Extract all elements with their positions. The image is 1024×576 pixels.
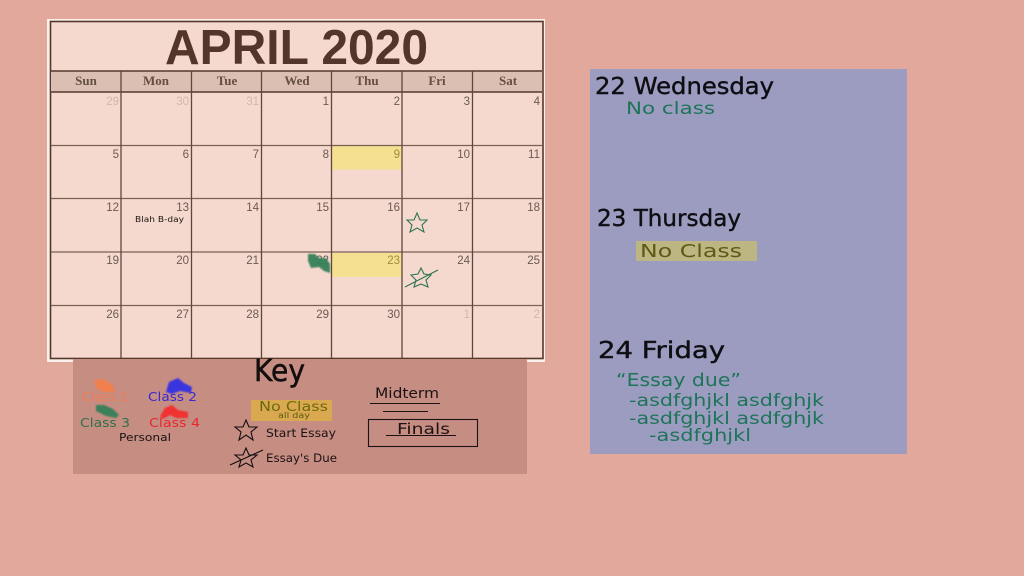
date numbers: 27 — [176, 309, 189, 321]
marker: class 3 on April 22 — [308, 254, 330, 273]
date numbers: 29 — [316, 309, 329, 321]
date numbers: 10 — [457, 149, 470, 161]
legend: midterm — [370, 386, 440, 412]
legend: essay's due: Essay's Due — [266, 451, 337, 465]
note: essay due: “Essay due” — [616, 370, 741, 391]
date numbers: 22 — [316, 255, 329, 267]
date numbers: 14 — [246, 202, 260, 214]
date numbers: 30 — [176, 96, 189, 108]
legend: class 2 — [148, 378, 197, 404]
legend: finals: Finals — [397, 420, 450, 438]
weekday header row: Mon — [143, 73, 170, 88]
date numbers: 1 — [323, 96, 329, 108]
day heading: 22 Wednesday: 22 Wednesday — [595, 74, 774, 100]
date numbers: 21 — [246, 255, 259, 267]
date numbers: 12 — [106, 202, 119, 214]
date numbers: 2 — [534, 309, 540, 321]
date numbers: 18 — [527, 202, 540, 214]
date numbers: 5 — [113, 149, 119, 161]
legend: start essay: Start Essay — [266, 426, 336, 440]
legend: personal: Personal — [119, 431, 171, 444]
legend: no class swatch: all day — [278, 411, 310, 420]
day heading: 23 Thursday: 23 Thursday — [597, 206, 741, 232]
legend: class 3: Class 3 — [80, 416, 130, 430]
note: essay due: -asdfghjkl — [649, 426, 751, 446]
panel: daily notes — [590, 69, 907, 454]
calendar title: APRIL 2020 — [165, 21, 428, 75]
date numbers: 20 — [176, 255, 189, 267]
day heading: 24 Friday: 24 Friday — [598, 338, 725, 364]
legend: class 1 — [82, 379, 128, 404]
date numbers: 1 — [464, 309, 470, 321]
date numbers: 15 — [316, 202, 329, 214]
date numbers: 19 — [106, 255, 119, 267]
panel: key — [73, 354, 527, 474]
weekday header row: Fri — [428, 73, 446, 88]
note: no class highlight — [636, 241, 757, 262]
legend: no class swatch: No Class — [259, 400, 328, 415]
date numbers — [106, 96, 541, 321]
note: essay due: -asdfghjkl asdfghjk — [629, 391, 824, 411]
key heading: Key — [254, 354, 305, 389]
date numbers: 24 — [457, 255, 471, 267]
note: no class: No class — [626, 99, 715, 119]
legend: midterm: Midterm — [375, 386, 439, 402]
date numbers: 11 — [528, 149, 540, 161]
date numbers: 7 — [253, 149, 259, 161]
panel: calendar — [47, 19, 545, 362]
date numbers: 30 — [387, 309, 400, 321]
note: essay due: -asdfghjkl asdfghjk — [629, 409, 824, 429]
weekday header row: Tue — [217, 73, 237, 88]
legend: essay's due — [230, 448, 337, 467]
legend: class 4 — [149, 405, 200, 430]
no class highlight: April 9 — [332, 146, 402, 170]
date numbers: 26 — [106, 309, 119, 321]
date numbers: 4 — [534, 96, 541, 108]
date numbers: 31 — [246, 96, 259, 108]
date numbers: 8 — [323, 149, 329, 161]
date numbers: 16 — [387, 202, 400, 214]
legend: class 3 — [80, 405, 130, 430]
weekday header row: Sun — [75, 73, 98, 88]
date numbers: 6 — [183, 149, 189, 161]
note: Blah B-day: Blah B-day — [135, 215, 184, 224]
date numbers: 28 — [246, 309, 259, 321]
icon: start essay star — [407, 213, 427, 232]
icon: essay due star — [405, 268, 438, 287]
legend: class 1: Class 1 — [82, 390, 128, 404]
weekday header row: Wed — [284, 73, 310, 88]
date numbers: 17 — [457, 202, 470, 214]
legend: finals — [368, 420, 478, 446]
date numbers: 2 — [394, 96, 400, 108]
legend: start essay — [235, 420, 336, 440]
weekday header row — [51, 71, 542, 92]
weekday header row: Sat — [499, 73, 518, 88]
date numbers: 25 — [527, 255, 540, 267]
legend: no class swatch — [251, 400, 332, 421]
legend: class 4: Class 4 — [149, 416, 200, 430]
date numbers: 13 — [176, 202, 189, 214]
date numbers: 23 — [387, 255, 400, 267]
date numbers: 9 — [394, 149, 400, 161]
note: essay due — [616, 370, 824, 446]
weekday header row: Thu — [355, 73, 379, 88]
date numbers: 3 — [464, 96, 470, 108]
legend: class 2: Class 2 — [148, 390, 197, 404]
date numbers: 29 — [106, 96, 119, 108]
note: no class highlight: No Class — [640, 241, 742, 262]
no class highlight: April 23 — [332, 253, 402, 277]
